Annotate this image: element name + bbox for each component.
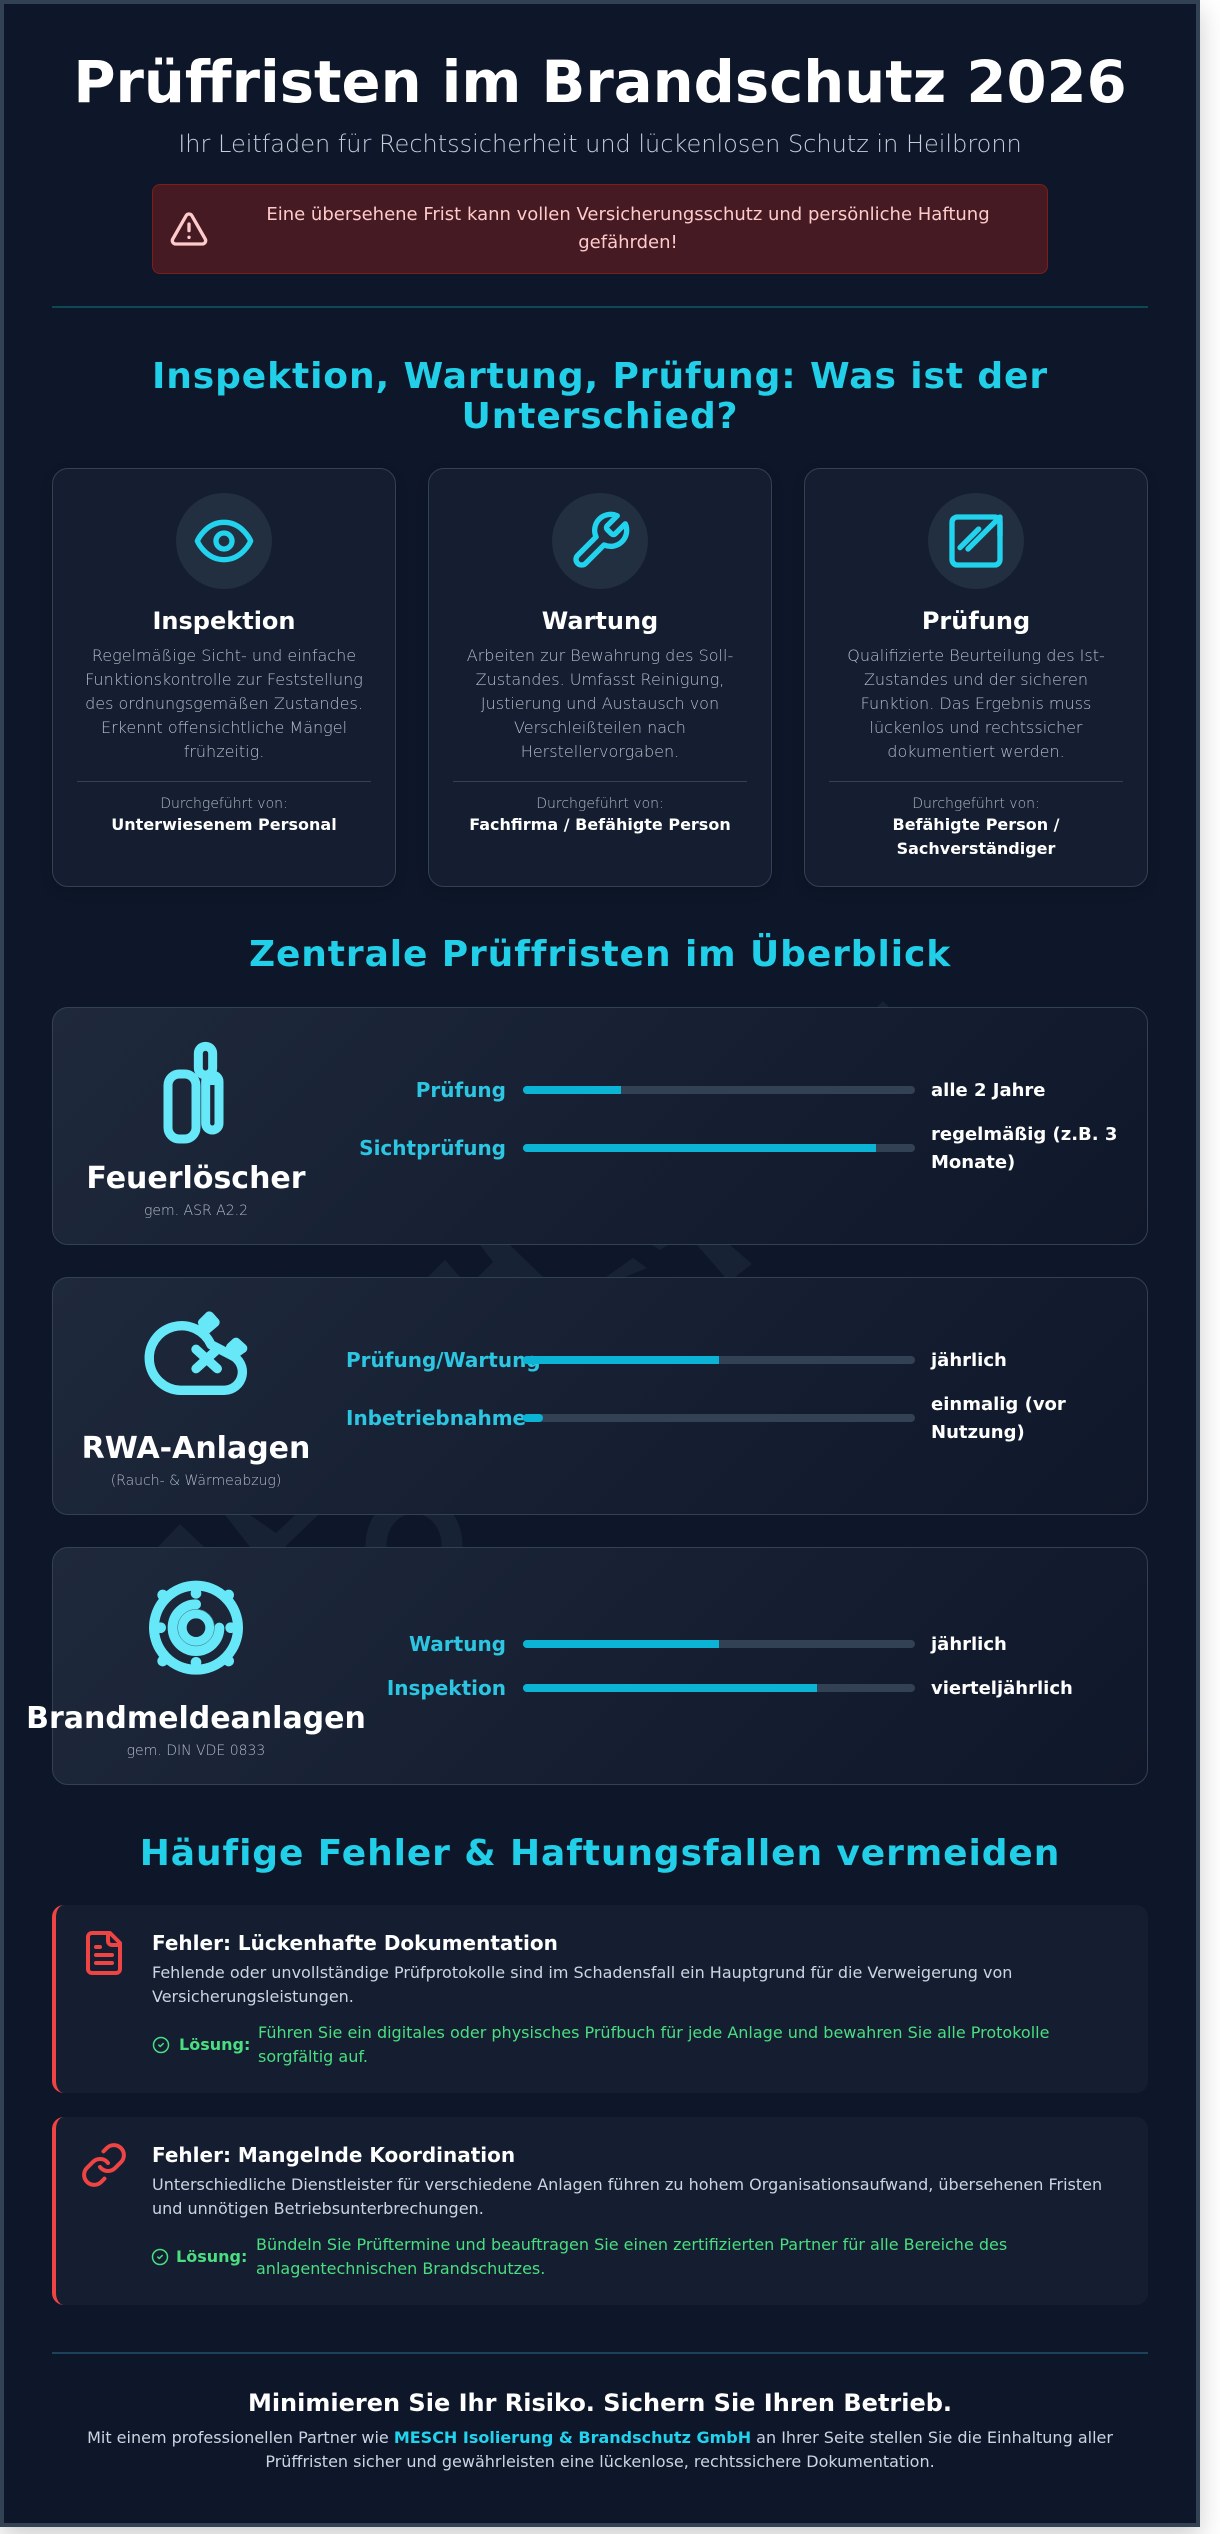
card description: dokumentiert werden. [887, 742, 1065, 761]
progress bar [523, 1414, 915, 1422]
error description: Fehlende oder unvollständige Prüfprotokolle sind im Schadensfall ein Hauptgrund für die Verweigerung von [152, 1963, 1012, 1982]
alert text: Eine übersehene Frist kann vollen Versicherungsschutz und persönliche Haftung [266, 204, 990, 225]
heading: difference [152, 356, 1048, 437]
row value: regelmäßig (z.B. 3 [931, 1124, 1117, 1145]
card description: Arbeiten zur Bewahrung des Soll- [467, 646, 733, 665]
solution label: Lösung: [179, 2035, 250, 2054]
card description [847, 646, 1105, 761]
card title: Inspektion [152, 607, 296, 635]
regulation: gem. ASR A2.2 [144, 1203, 248, 1219]
footer heading: Minimieren Sie Ihr Risiko. Sichern Sie Ihren Betrieb. [248, 2389, 952, 2417]
error title: Fehler: Mangelnde Koordination [152, 2143, 515, 2167]
performed by value [892, 815, 1060, 858]
icon: link [82, 2143, 126, 2187]
performed by label: Durchgeführt von: [912, 796, 1040, 812]
title: Brandmeldeanlagen [26, 1701, 366, 1736]
icon: check [152, 2036, 170, 2054]
progress bar [523, 1144, 915, 1152]
panel: Inspektion [52, 468, 396, 887]
card description [467, 646, 733, 761]
progress bar [523, 1356, 915, 1364]
row value [931, 1394, 1066, 1443]
footer text: Mit einem professionellen Partner wie MESCH Isolierung & Brandschutz GmbH an Ihrer Seite stellen Sie die Einhaltung aller [87, 2428, 1113, 2447]
row value: alle 2 Jahre [931, 1080, 1046, 1101]
title: RWA-Anlagen [82, 1431, 310, 1466]
regulation: (Rauch- & Wärmeabzug) [111, 1473, 281, 1489]
row label: Inspektion [387, 1676, 506, 1700]
solution [152, 2023, 1049, 2066]
solution [152, 2235, 1007, 2278]
solution label: Lösung: [176, 2247, 247, 2266]
icon: check [152, 2248, 168, 2266]
error description [152, 2175, 1102, 2218]
panel: RWA-Anlagen [52, 1277, 1148, 1515]
card description [85, 646, 363, 761]
icon: wrench [552, 493, 648, 589]
regulation: gem. DIN VDE 0833 [127, 1743, 265, 1759]
icon: checked box with arrow [928, 493, 1024, 589]
icon: alarm sensor [149, 1580, 243, 1675]
card description: Erkennt offensichtliche Mängel [101, 718, 347, 737]
title: Prüffristen im Brandschutz 2026 [73, 49, 1127, 116]
icon: eye [176, 493, 272, 589]
performed by value: Unterwiesenem Personal [111, 815, 337, 834]
row value: jährlich [931, 1350, 1007, 1371]
card description: Zustandes. Umfasst Reinigung, [476, 670, 724, 689]
performed by label: Durchgeführt von: [536, 796, 664, 812]
progress bar [523, 1684, 915, 1692]
heading: overview: Zentrale Prüffristen im Überblick [249, 934, 951, 975]
alert text [266, 204, 990, 253]
card description: frühzeitig. [184, 742, 264, 761]
row value: einmalig (vor [931, 1394, 1066, 1415]
error description [152, 1963, 1012, 2006]
card description: Justierung und Austausch von [481, 694, 719, 713]
row label: Inbetriebnahme [346, 1406, 526, 1430]
icon: warning triangle [170, 212, 208, 246]
solution text: Führen Sie ein digitales oder physisches Prüfbuch für jede Anlage und bewahren Sie alle Protokolle [258, 2023, 1049, 2042]
performed by value: Sachverständiger [897, 839, 1055, 858]
subtitle: Ihr Leitfaden für Rechtssicherheit und lückenlosen Schutz in Heilbronn [178, 130, 1022, 158]
alert banner [152, 184, 1048, 274]
title: Feuerlöscher [86, 1161, 306, 1196]
card description: Herstellervorgaben. [521, 742, 679, 761]
icon: extinguisher [164, 1042, 224, 1144]
card description: lückenlos und rechtssicher [870, 718, 1082, 737]
heading: errors: Häufige Fehler & Haftungsfallen vermeiden [140, 1833, 1060, 1874]
solution text [256, 2235, 1007, 2278]
solution text: anlagentechnischen Brandschutzes. [256, 2259, 545, 2278]
card description: Verschleißteilen nach [514, 718, 686, 737]
error description: und unnötigen Betriebsunterbrechungen. [152, 2199, 484, 2218]
row label: Prüfung/Wartung [346, 1348, 541, 1372]
row label: Wartung [409, 1632, 506, 1656]
solution text: sorgfältig auf. [258, 2047, 368, 2066]
card description: Zustandes und der sicheren [864, 670, 1088, 689]
row value: Monate) [931, 1152, 1015, 1173]
icon: smoke vent [144, 1311, 248, 1395]
heading: difference: Inspektion, Wartung, Prüfung: Was ist der [152, 356, 1048, 397]
row value: jährlich [931, 1634, 1007, 1655]
performed by value: Fachfirma / Befähigte Person [469, 815, 731, 834]
panel: error coordination [52, 2117, 1148, 2305]
card description: Qualifizierte Beurteilung des Ist- [847, 646, 1105, 665]
error description: Versicherungsleistungen. [152, 1987, 354, 2006]
progress bar [523, 1086, 915, 1094]
progress bar [523, 1640, 915, 1648]
error description: Unterschiedliche Dienstleister für verschiedene Anlagen führen zu hohem Organisationsaufwand, übersehenen Fristen [152, 2175, 1102, 2194]
panel: Prüfung [804, 468, 1148, 887]
row value: vierteljährlich [931, 1678, 1073, 1699]
card title: Prüfung [922, 607, 1030, 635]
solution text [258, 2023, 1049, 2066]
panel: Feuerlöscher [52, 1007, 1148, 1245]
alert text: gefährden! [578, 232, 678, 253]
row label: Prüfung [416, 1078, 506, 1102]
icon: document [86, 1931, 122, 1975]
panel: Wartung [428, 468, 772, 887]
row label: Sichtprüfung [359, 1136, 506, 1160]
footer text: Prüffristen sicher und gewährleisten eine lückenlose, rechtssichere Dokumentation. [265, 2452, 935, 2471]
footer text [87, 2428, 1113, 2471]
card description: des ordnungsgemäßen Zustandes. [85, 694, 363, 713]
card description: Funktion. Das Ergebnis muss [861, 694, 1091, 713]
heading: difference: Unterschied? [462, 396, 738, 437]
error title: Fehler: Lückenhafte Dokumentation [152, 1931, 558, 1955]
solution text: Bündeln Sie Prüftermine und beauftragen Sie einen zertifizierten Partner für alle Bereiche des [256, 2235, 1007, 2254]
performed by label: Durchgeführt von: [160, 796, 288, 812]
card title: Wartung [542, 607, 658, 635]
panel: error documentation [52, 1905, 1148, 2093]
card description: Regelmäßige Sicht- und einfache [92, 646, 356, 665]
row value: Nutzung) [931, 1422, 1025, 1443]
performed by value: Befähigte Person / [892, 815, 1060, 834]
panel: Brandmeldeanlagen [52, 1547, 1148, 1785]
card description: Funktionskontrolle zur Feststellung [85, 670, 363, 689]
row value [931, 1124, 1117, 1173]
